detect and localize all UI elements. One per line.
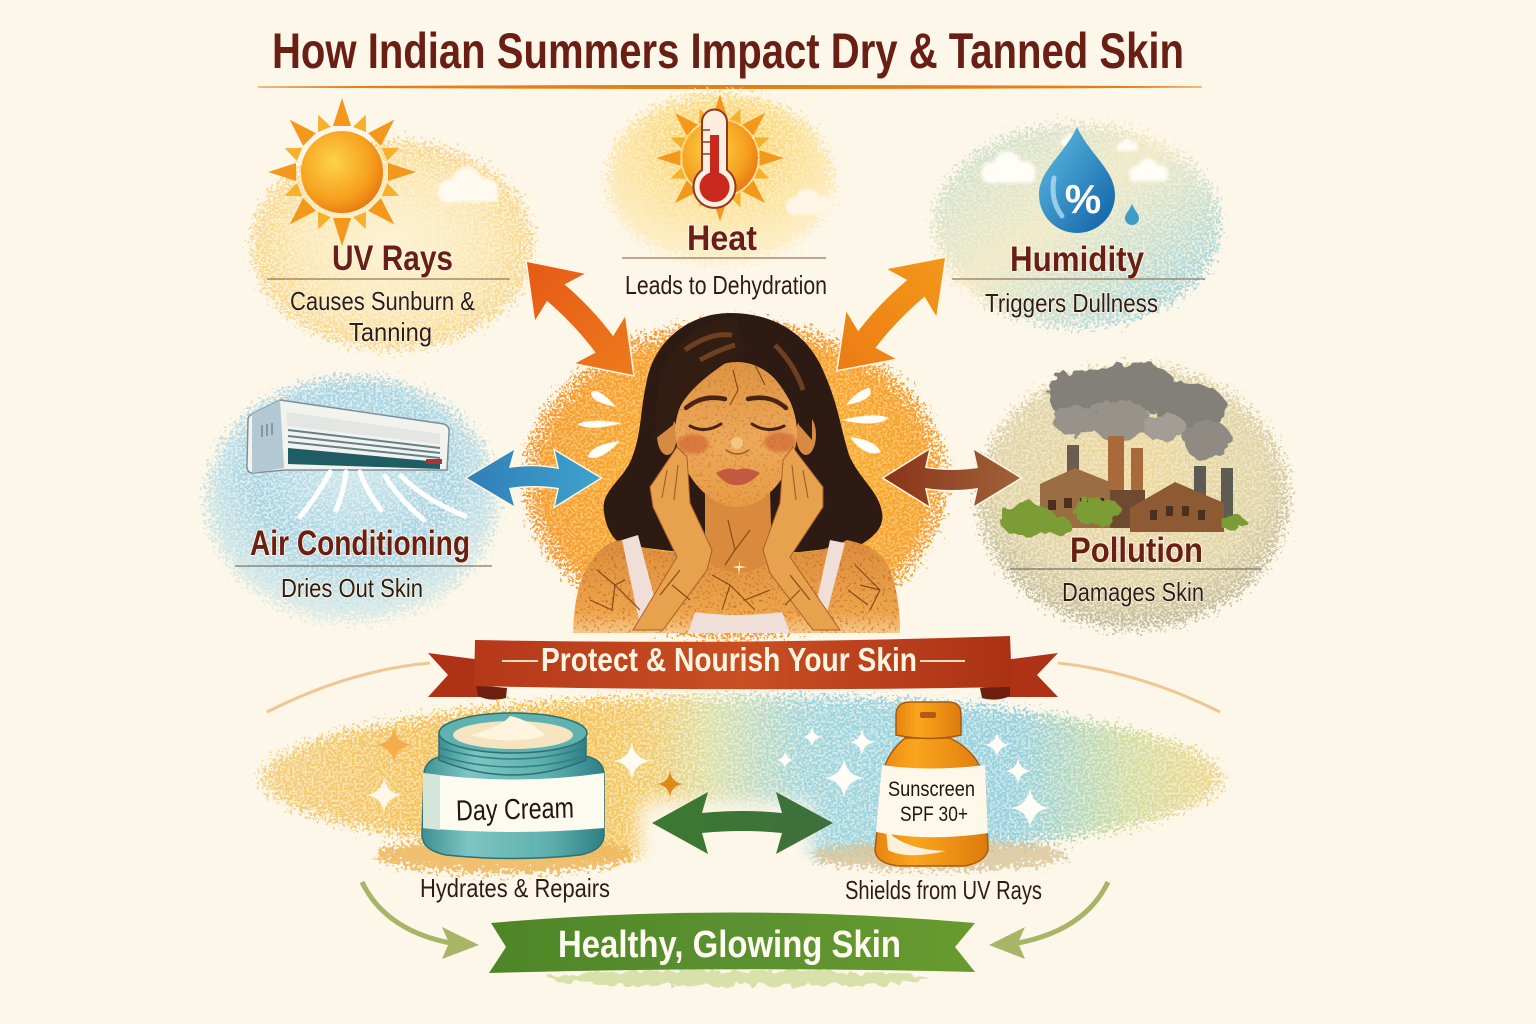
icon: clouds	[981, 134, 1168, 184]
text: causes sunburn and tanning	[290, 286, 475, 347]
text: hydrates and repairs: Hydrates & Repairs	[420, 873, 610, 903]
icon: airflow	[300, 472, 465, 520]
text: triggers dullness: Triggers Dullness	[985, 288, 1158, 318]
heading: UV Rays: UV Rays	[332, 239, 453, 278]
curve: right arc	[1058, 663, 1220, 712]
hair front	[654, 318, 746, 440]
banner: healthy glowing skin: Healthy, Glowing Skin	[558, 924, 901, 966]
text: shields from UV rays: Shields from UV Rays	[845, 875, 1042, 905]
arrow: pollution to face	[884, 450, 1020, 506]
banner: protect and nourish	[428, 636, 1058, 700]
arrow: day cream and sunscreen	[652, 792, 833, 854]
panel: UV rays	[250, 98, 534, 350]
label: Sunscreen: Sunscreen	[888, 778, 975, 801]
text: leads to dehydration: Leads to Dehydration	[625, 270, 827, 300]
text: causes sunburn and tanning: Tanning	[349, 317, 432, 347]
ears	[657, 415, 816, 455]
icon: cloud	[786, 188, 831, 215]
face mottling	[675, 362, 797, 507]
arrow: UV rays to face	[502, 239, 658, 398]
face	[675, 362, 797, 507]
top straps and vest	[622, 535, 845, 633]
blush freckles	[677, 432, 796, 454]
icon: thermometer	[694, 110, 736, 208]
panel: humidity	[932, 122, 1222, 328]
lips	[716, 469, 760, 485]
banner: healthy glowing skin	[489, 912, 975, 986]
text: dries out skin: Dries Out Skin	[281, 573, 423, 603]
icon: day cream jar	[422, 713, 604, 858]
icon: left stress marks	[577, 391, 622, 458]
arrow: right to healthy skin	[989, 882, 1108, 959]
icon: sun behind thermometer	[656, 94, 784, 222]
panel: air conditioning	[204, 375, 500, 625]
icons: sparkles	[366, 727, 1050, 828]
body and shoulders	[573, 530, 900, 633]
arrow: left to healthy skin	[362, 882, 479, 959]
text: damages skin: Damages Skin	[1062, 577, 1204, 607]
banner: protect and nourish: Protect & Nourish Your Skin	[541, 641, 917, 678]
title: How Indian Summers Impact Dry & Tanned Skin	[272, 23, 1184, 79]
neck	[705, 490, 772, 572]
panel: skincare band	[260, 694, 1224, 882]
illustration: woman with dry skin	[573, 313, 900, 633]
facial features	[686, 398, 786, 454]
neck sparkle	[732, 559, 747, 575]
icon: smoke	[1047, 363, 1231, 460]
arrow: air conditioning to face	[467, 450, 600, 506]
icon: sunscreen bottle	[875, 702, 988, 866]
icon: air conditioner	[247, 400, 449, 473]
icon: factory	[1040, 436, 1233, 532]
left hand	[633, 447, 712, 630]
hair back	[604, 313, 882, 552]
icon: bushes	[1000, 498, 1248, 537]
icon: right stress marks	[842, 388, 889, 453]
curve: left arc	[267, 663, 430, 712]
skin cracks	[590, 365, 880, 610]
skin mottling	[573, 530, 900, 633]
central sun glow	[523, 320, 947, 640]
heading: Humidity: Humidity	[1010, 240, 1144, 279]
arrow: humidity to face	[813, 234, 970, 393]
text: causes sunburn and tanning: Causes Sunburn &	[290, 286, 475, 316]
right hand	[763, 447, 840, 630]
panel: heat	[604, 92, 836, 300]
label: SPF 30+: SPF 30+	[900, 803, 968, 826]
heading: Air Conditioning: Air Conditioning	[250, 524, 470, 563]
nose highlight	[731, 437, 743, 449]
icon: water drop: %	[1065, 176, 1101, 222]
panel: pollution	[976, 363, 1290, 630]
heading: Heat: Heat	[687, 219, 757, 258]
icon: water drop	[1039, 127, 1139, 233]
icon: sun	[268, 98, 416, 246]
heading: Pollution: Pollution	[1070, 531, 1203, 570]
icon: cloud	[438, 167, 498, 203]
label: Day Cream: Day Cream	[456, 792, 574, 828]
